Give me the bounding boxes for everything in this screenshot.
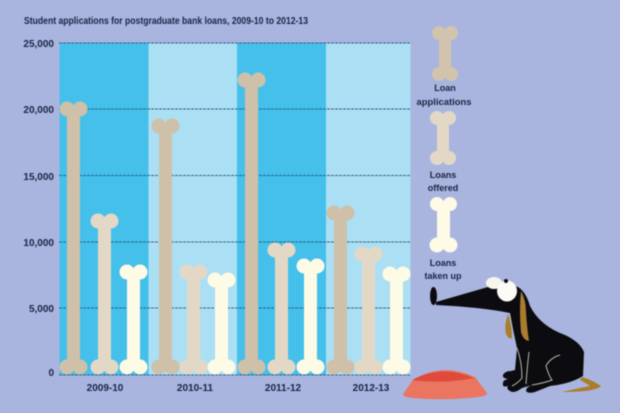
bones 2009-10 [60, 102, 148, 374]
panel: plot background bands [60, 43, 410, 375]
y axis labels: 15,000 [23, 172, 54, 183]
legend: loan applications: Loan [434, 83, 456, 93]
bones 2010-11 [152, 118, 236, 374]
x axis labels: 2010-11 [177, 383, 214, 394]
legend: loans taken up [424, 197, 462, 281]
y axis labels: 10,000 [23, 238, 54, 249]
legend: loans offered: Loans [430, 170, 456, 180]
dog tail [562, 377, 601, 392]
y axis labels: 0 [48, 368, 54, 379]
legend: loans taken up: taken up [424, 271, 462, 281]
x axis labels [87, 383, 390, 394]
y axis labels: 20,000 [23, 105, 54, 116]
legend: loans taken up: Loans [430, 258, 456, 268]
x axis labels: 2009-10 [87, 383, 124, 394]
dog leg outlines [512, 348, 560, 386]
bones 2012-13 [326, 206, 410, 374]
legend: loan applications: applications [416, 97, 472, 107]
title: Student applications for postgraduate bank loans, 2009-10 to 2012-13 [24, 16, 308, 27]
dog ears [520, 291, 529, 341]
icon: black dog [430, 277, 601, 393]
legend: loans offered [428, 111, 458, 193]
icon: red dog bowl [403, 370, 487, 399]
dog body [436, 284, 584, 393]
legend: loans offered: offered [428, 183, 458, 193]
x axis labels: 2011-12 [265, 383, 302, 394]
x axis labels: 2012-13 [353, 383, 390, 394]
y axis labels: 5,000 [29, 304, 54, 315]
y axis labels [23, 39, 54, 379]
bones 2011-12 [238, 72, 324, 374]
legend: loan applications [416, 26, 472, 107]
y axis labels: 25,000 [23, 39, 54, 50]
dog nose [430, 287, 437, 305]
dog eyes [486, 277, 502, 289]
